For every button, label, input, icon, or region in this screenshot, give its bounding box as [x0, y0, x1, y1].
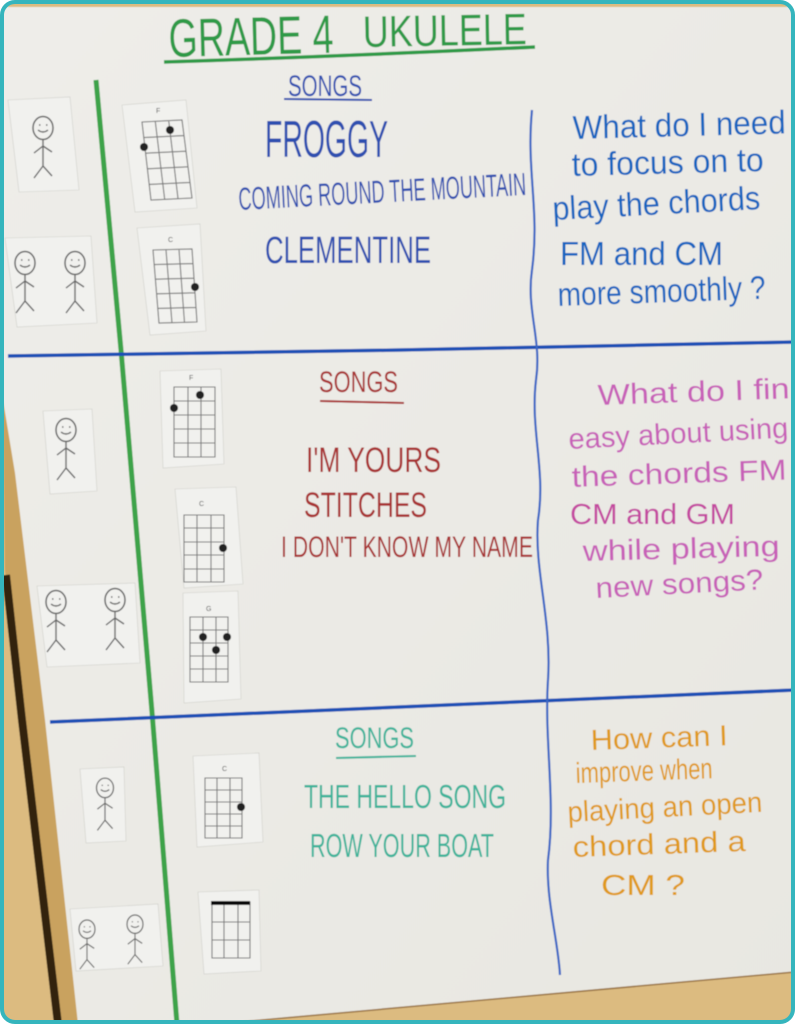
row 1 chord cards: [122, 100, 206, 335]
title: GRADE 4: [168, 5, 334, 69]
row 3 question: improve when: [575, 753, 713, 790]
horizontal blue divider 1: [8, 342, 795, 356]
row 2 chord cards: C: [199, 501, 204, 508]
row 2 question: CM and GM: [570, 499, 735, 531]
row 3 question: playing an open: [567, 787, 763, 829]
row 3 songs: [304, 722, 506, 864]
row 3 question: [567, 720, 763, 902]
row 1 question: FM and CM: [560, 235, 723, 272]
horizontal blue divider 2: [50, 690, 795, 722]
title: [164, 5, 535, 69]
row 2 question: new songs?: [595, 564, 764, 605]
row 1 chord cards: C: [168, 237, 173, 244]
row 3 chord cards: [193, 753, 263, 974]
row 2 songs: STITCHES: [304, 486, 427, 525]
row 3 chord cards: C: [222, 766, 227, 773]
row 2 figures: [37, 409, 140, 667]
row 2 songs: [281, 366, 533, 564]
row 3 songs: THE HELLO SONG: [304, 778, 506, 815]
row 2 question: [568, 373, 790, 605]
row 1 songs: SONGS: [288, 70, 362, 103]
row 3 figures: [70, 767, 163, 971]
row 2 question: What do I fin: [597, 373, 790, 412]
row 2 question: the chords FM: [571, 455, 787, 494]
row 3 songs: SONGS: [335, 722, 414, 755]
row 1 chord cards: F: [156, 108, 160, 115]
row 2 songs: SONGS: [319, 366, 398, 399]
row 1 songs: FROGGY: [265, 111, 388, 169]
row 1 question: to focus on to: [571, 141, 764, 183]
row 3 songs: ROW YOUR BOAT: [310, 827, 494, 864]
row 3 question: How can I: [590, 720, 728, 757]
wavy vertical blue line: [530, 110, 560, 975]
row 2 songs: I DON'T KNOW MY NAME: [281, 531, 533, 564]
row 2 songs: I'M YOURS: [306, 441, 441, 480]
row 2 question: easy about using: [568, 413, 789, 456]
vertical green line: [96, 80, 177, 1024]
row 1 question: [551, 103, 786, 313]
row 2 question: while playing: [581, 531, 780, 568]
row 2 chord cards: G: [206, 606, 211, 613]
row 1 songs: [237, 70, 527, 272]
title: UKULELE: [362, 5, 527, 57]
board shadow edge: [6, 575, 58, 1024]
row 2 chord cards: [160, 369, 243, 703]
row 3 question: CM ?: [601, 870, 685, 902]
row 1 question: play the chords: [551, 179, 761, 227]
row 1 question: What do I need: [572, 103, 786, 146]
row 1 figures: [5, 97, 97, 327]
row 1 songs: COMING ROUND THE MOUNTAIN: [237, 166, 527, 217]
row 2 chord cards: F: [189, 375, 193, 382]
board inner strip: [3, 400, 78, 1024]
row 1 songs: CLEMENTINE: [265, 230, 431, 272]
row 1 question: more smoothly ?: [557, 269, 766, 313]
row 3 question: chord and a: [572, 826, 747, 864]
